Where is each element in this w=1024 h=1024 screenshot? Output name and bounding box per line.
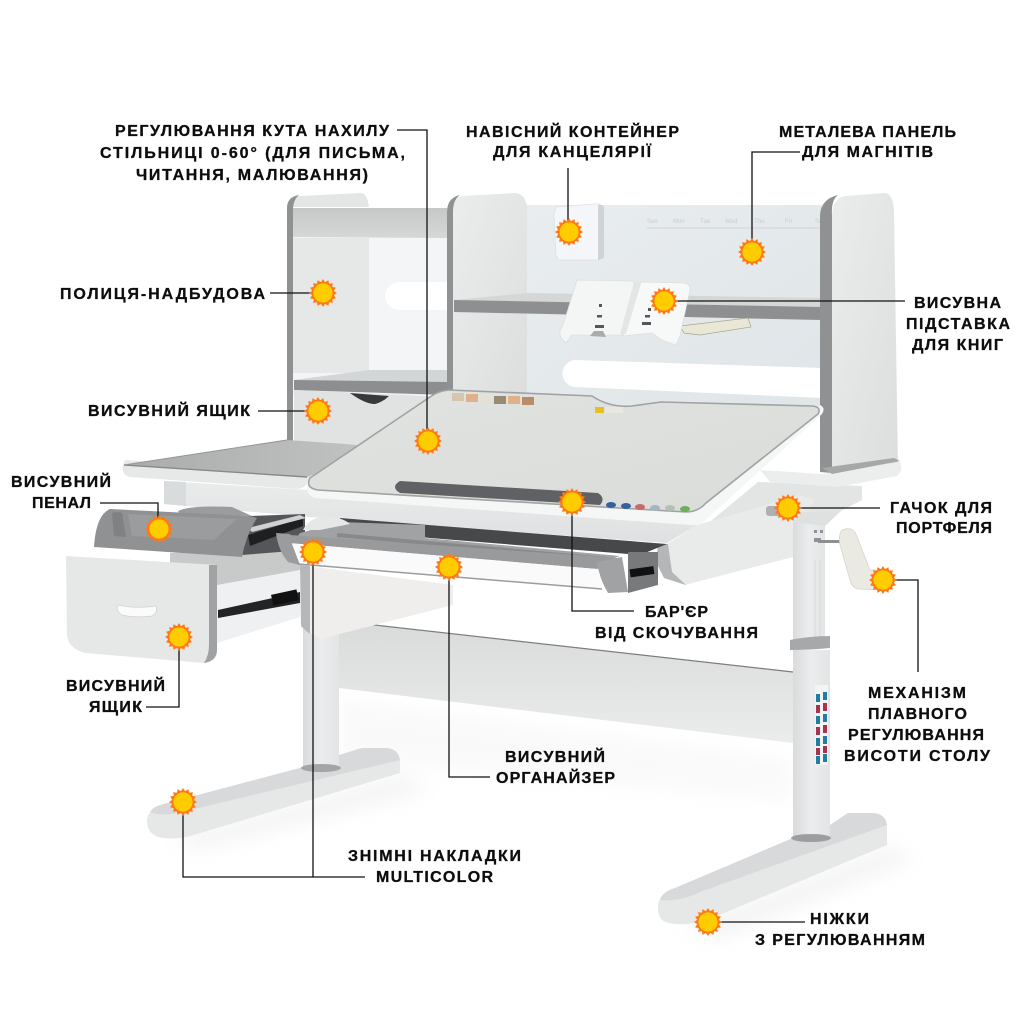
marker: multicolor trim on foot xyxy=(169,788,197,816)
label: tilt adjustment: ЧИТАННЯ, МАЛЮВАННЯ) xyxy=(136,167,368,184)
label: pencil case: ПЕНАЛ xyxy=(32,495,91,512)
drawer interior and rails xyxy=(170,506,306,590)
marker: add-on shelf xyxy=(309,279,337,307)
label: front drawer xyxy=(66,676,165,716)
label: height mechanism: МЕХАНІЗМ xyxy=(868,685,966,702)
height adjustment crank handle xyxy=(818,529,882,590)
right hutch back panel with magnet board: Sun xyxy=(647,219,658,225)
label: bag hook: ГАЧОК ДЛЯ xyxy=(890,500,992,517)
pull-out book stand xyxy=(560,280,751,345)
right apron and under-desk cabinet xyxy=(656,495,815,585)
marker: hanging container xyxy=(555,218,583,246)
right fixed desktop edge xyxy=(700,458,901,530)
label: metal panel: ДЛЯ МАГНІТІВ xyxy=(802,144,933,161)
label: bag hook: ПОРТФЕЛЯ xyxy=(896,520,992,537)
label: tilt adjustment: СТІЛЬНИЦІ 0-60° (ДЛЯ ПИСЬМА, xyxy=(100,145,405,162)
marker: adjustable foot xyxy=(694,908,722,936)
marker: bag hook xyxy=(774,494,802,522)
main apron and left desktop part xyxy=(123,440,697,543)
label: height mechanism: РЕГУЛЮВАННЯ xyxy=(848,727,984,744)
label: multicolor trims: MULTICOLOR xyxy=(376,869,493,886)
label: tilt adjustment: РЕГУЛЮВАННЯ КУТА НАХИЛУ xyxy=(115,123,390,140)
marker: book stand xyxy=(650,287,678,315)
right hutch back panel with magnet board: Tue xyxy=(700,219,711,225)
label: height mechanism: ПЛАВНОГО xyxy=(868,706,967,723)
left leg xyxy=(303,615,339,767)
hutch middle shelf xyxy=(454,293,822,320)
floor shadows xyxy=(170,700,915,940)
label: adjustable feet: З РЕГУЛЮВАННЯМ xyxy=(755,932,925,949)
label: height mechanism xyxy=(844,685,991,765)
organizer tray with white bar xyxy=(276,517,667,593)
label: book stand: ДЛЯ КНИГ xyxy=(912,337,1003,354)
marker: pencil case xyxy=(145,515,173,543)
label: metal panel: МЕТАЛЕВА ПАНЕЛЬ xyxy=(779,124,956,141)
right leg lower tube with collar and height chart xyxy=(790,636,830,838)
label: hanging container: НАВІСНИЙ КОНТЕЙНЕР xyxy=(466,122,679,141)
label: anti-roll barrier xyxy=(595,604,758,642)
label: tilt adjustment xyxy=(100,123,405,184)
bag hook xyxy=(766,506,792,516)
marker: crank handle xyxy=(869,566,897,594)
left foot xyxy=(147,740,400,838)
right hutch back panel with magnet board: Sa xyxy=(815,219,823,225)
tilting tabletop xyxy=(307,390,824,525)
marker: front drawer xyxy=(165,623,193,651)
pencil case xyxy=(94,509,257,557)
label: multicolor trims: ЗНІМНІ НАКЛАДКИ xyxy=(348,848,521,865)
right hutch back panel with magnet board: Mon xyxy=(673,219,685,225)
label: pencil case xyxy=(11,472,111,512)
label: pencil case: ВИСУВНИЙ xyxy=(11,472,111,491)
marker suns xyxy=(145,218,897,936)
label: metal panel xyxy=(779,124,956,161)
label: front drawer: ЯЩИК xyxy=(89,699,142,716)
callout leader lines xyxy=(100,130,918,922)
right hutch back panel with magnet board: Wed xyxy=(725,219,737,225)
right leg upper tube xyxy=(793,510,842,640)
marker: hutch drawer xyxy=(304,397,332,425)
label: organizer: ВИСУВНИЙ xyxy=(505,747,605,766)
marker: organizer xyxy=(435,553,463,581)
right hutch back panel with magnet board: Fri xyxy=(785,219,792,225)
label: hanging container xyxy=(466,122,679,161)
right hutch back panel with magnet board: Thu xyxy=(754,219,764,225)
label: front drawer: ВИСУВНИЙ xyxy=(66,676,165,695)
left hutch shelf unit xyxy=(287,193,447,445)
tabletop stickers xyxy=(452,393,690,512)
label: book stand: ВИСУВНА xyxy=(914,295,1001,312)
right hutch left side panel xyxy=(447,193,527,405)
front ledge on tabletop xyxy=(395,481,603,505)
label: book stand: ПІДСТАВКА xyxy=(906,316,1010,333)
left hutch small drawer xyxy=(294,390,430,445)
hanging organizer box xyxy=(300,565,453,639)
marker: tilting top xyxy=(414,427,442,455)
label: organizer xyxy=(496,747,615,787)
right hutch right side panel xyxy=(820,193,898,474)
marker: anti-roll barrier xyxy=(558,488,586,516)
label: height mechanism: ВИСОТИ СТОЛУ xyxy=(844,748,991,765)
label: add-on shelf: ПОЛИЦЯ-НАДБУДОВА xyxy=(60,286,265,303)
marker: multicolor trim on tray xyxy=(299,538,327,566)
label: hutch drawer: ВИСУВНИЙ ЯЩИК xyxy=(88,401,250,420)
label: multicolor trims xyxy=(348,848,521,886)
right foot xyxy=(658,782,887,924)
open pull-out drawer body xyxy=(217,570,300,643)
front drawer with handle xyxy=(66,556,217,663)
label: book stand xyxy=(906,295,1010,354)
hanging stationery container xyxy=(554,204,604,260)
label: bag hook xyxy=(890,500,992,537)
label: anti-roll barrier: БАР'ЄР xyxy=(645,604,708,621)
marker: metal panel xyxy=(738,238,766,266)
crossbeam xyxy=(339,621,793,743)
label: adjustable feet xyxy=(755,911,925,949)
label: organizer: ОРГАНАЙЗЕР xyxy=(496,768,615,787)
label: adjustable feet: НІЖКИ xyxy=(810,911,869,928)
desk illustration xyxy=(66,193,901,924)
right hutch back panel with magnet board xyxy=(454,205,823,410)
label: hanging container: ДЛЯ КАНЦЕЛЯРІЇ xyxy=(493,143,652,161)
label: anti-roll barrier: ВІД СКОЧУВАННЯ xyxy=(595,625,758,642)
